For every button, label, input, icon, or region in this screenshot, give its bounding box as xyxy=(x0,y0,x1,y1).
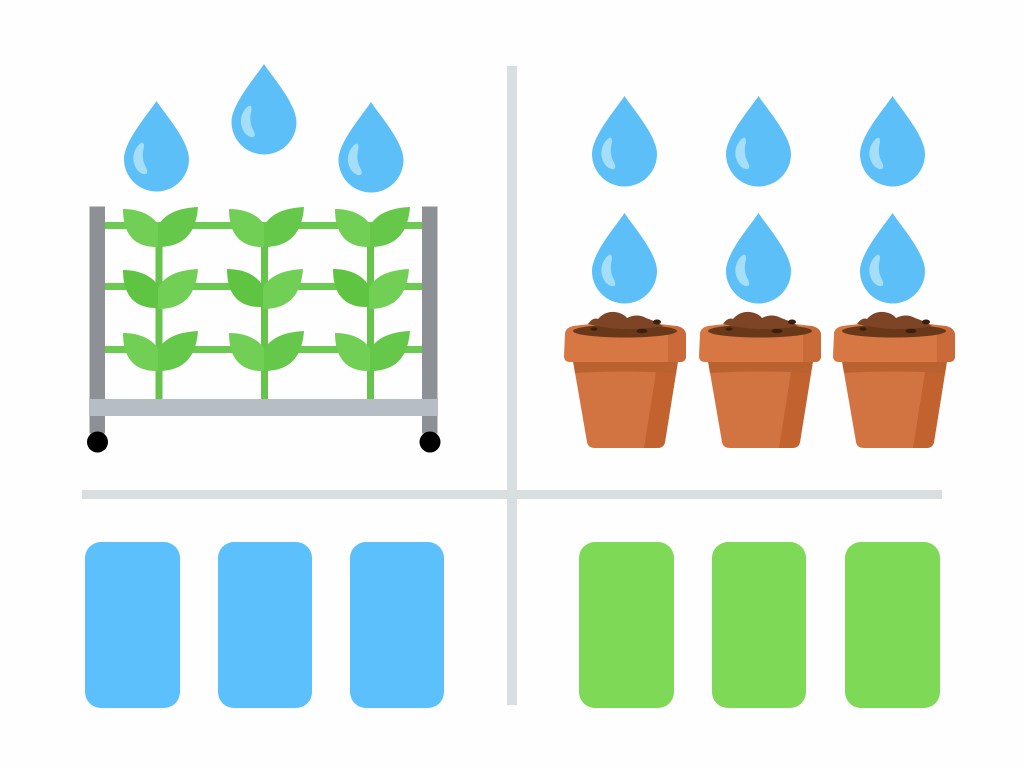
rack shelf xyxy=(89,399,438,416)
horizontal divider xyxy=(82,490,942,499)
panel: vertical rack system xyxy=(87,64,440,452)
water drops bottom row xyxy=(592,213,925,304)
water drops above rack xyxy=(124,64,404,192)
vertical divider xyxy=(507,66,517,705)
horizontal trellis bars xyxy=(104,222,423,353)
rack posts xyxy=(90,206,438,434)
rack wheels xyxy=(87,432,440,452)
plant column 1 xyxy=(123,207,198,399)
plant column 2 xyxy=(227,207,304,399)
terracotta pots with soil xyxy=(564,312,955,448)
blue cards xyxy=(85,542,444,708)
plant column 3 xyxy=(333,207,410,399)
panel: potted plants xyxy=(564,96,955,448)
water drops top row xyxy=(592,96,925,186)
green cards xyxy=(579,542,940,708)
